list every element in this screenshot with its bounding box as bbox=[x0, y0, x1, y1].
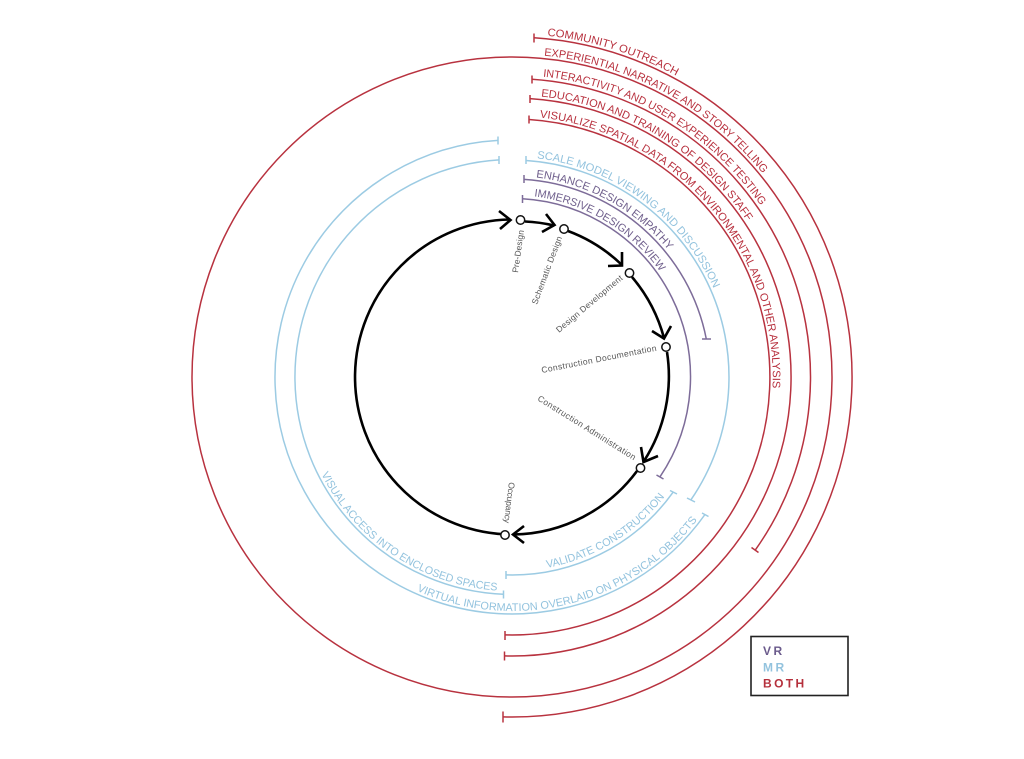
arc: scale model viewing and discussion: SCALE MODEL VIEWING AND DISCUSSION bbox=[538, 151, 720, 288]
legend: VR: VR bbox=[763, 644, 785, 658]
arc: enhance design empathy: ENHANCE DESIGN EMPATHY bbox=[536, 170, 674, 248]
arc: community outreach: COMMUNITY OUTREACH bbox=[548, 28, 679, 76]
arc: education and training of design staff: EDUCATION AND TRAINING OF DESIGN STAFF bbox=[542, 89, 754, 220]
node: construction administration bbox=[636, 464, 645, 472]
stage label: construction administration: Construction Administration bbox=[536, 393, 638, 462]
arc: virtual information overlaid on physical objects bbox=[274, 136, 709, 615]
arc: visualize spatial data bbox=[504, 110, 780, 640]
arrow: to construction administration bbox=[641, 352, 669, 462]
node: design development bbox=[625, 269, 634, 277]
node: pre-design bbox=[516, 216, 525, 224]
arrow: to occupancy bbox=[513, 471, 637, 543]
legend: MR: MR bbox=[763, 660, 787, 674]
node: schematic design bbox=[560, 225, 568, 233]
arc: visual access into enclosed spaces bbox=[294, 156, 504, 598]
arrow: to pre-design bbox=[499, 211, 510, 229]
arc: enhance design empathy bbox=[523, 170, 711, 340]
arc: immersive design review bbox=[522, 189, 692, 480]
legend bbox=[751, 636, 848, 696]
arc: immersive design review: IMMERSIVE DESIGN REVIEW bbox=[535, 189, 666, 270]
arc: visualize spatial data: VISUALIZE SPATIAL DATA FROM ENVIRONMENTAL AND OTHER ANALYSIS bbox=[540, 110, 780, 388]
stage label: occupancy: Occupancy bbox=[502, 482, 517, 524]
legend: both: BOTH bbox=[763, 676, 807, 690]
stage label: schematic design: Schematic Design bbox=[530, 235, 564, 306]
arc: education and training of design staff bbox=[504, 89, 792, 660]
arc: visual access into enclosed spaces: VISUAL ACCESS INTO ENCLOSED SPACES bbox=[322, 470, 497, 590]
arrow: to schematic design bbox=[525, 214, 554, 232]
node: occupancy bbox=[501, 531, 509, 539]
node: construction documentation bbox=[662, 343, 670, 351]
stage label: pre-design: Pre-Design bbox=[510, 229, 526, 273]
arrow: to design development bbox=[568, 231, 622, 266]
arc: interactivity and user experience testing bbox=[531, 69, 812, 554]
arc: interactivity and user experience testing: INTERACTIVITY AND USER EXPERIENCE TESTING bbox=[544, 69, 766, 204]
arc: virtual information overlaid on physical objects: VIRTUAL INFORMATION OVERLAID ON PHYSICAL OBJECTS bbox=[420, 516, 696, 612]
arc: experiential narrative and story telling: EXPERIENTIAL NARRATIVE AND STORY TELLING bbox=[544, 48, 768, 172]
arc: scale model viewing and discussion bbox=[525, 151, 730, 502]
cycle path bbox=[355, 220, 510, 534]
stage label: construction documentation: Construction Documentation bbox=[540, 343, 657, 375]
stage label: design development: Design Development bbox=[554, 272, 625, 335]
arrow: to construction documentation bbox=[632, 277, 671, 338]
arc: validate construction bbox=[505, 490, 678, 579]
black project cycle bbox=[355, 211, 671, 543]
arc: validate construction: VALIDATE CONSTRUCTION bbox=[546, 492, 664, 568]
